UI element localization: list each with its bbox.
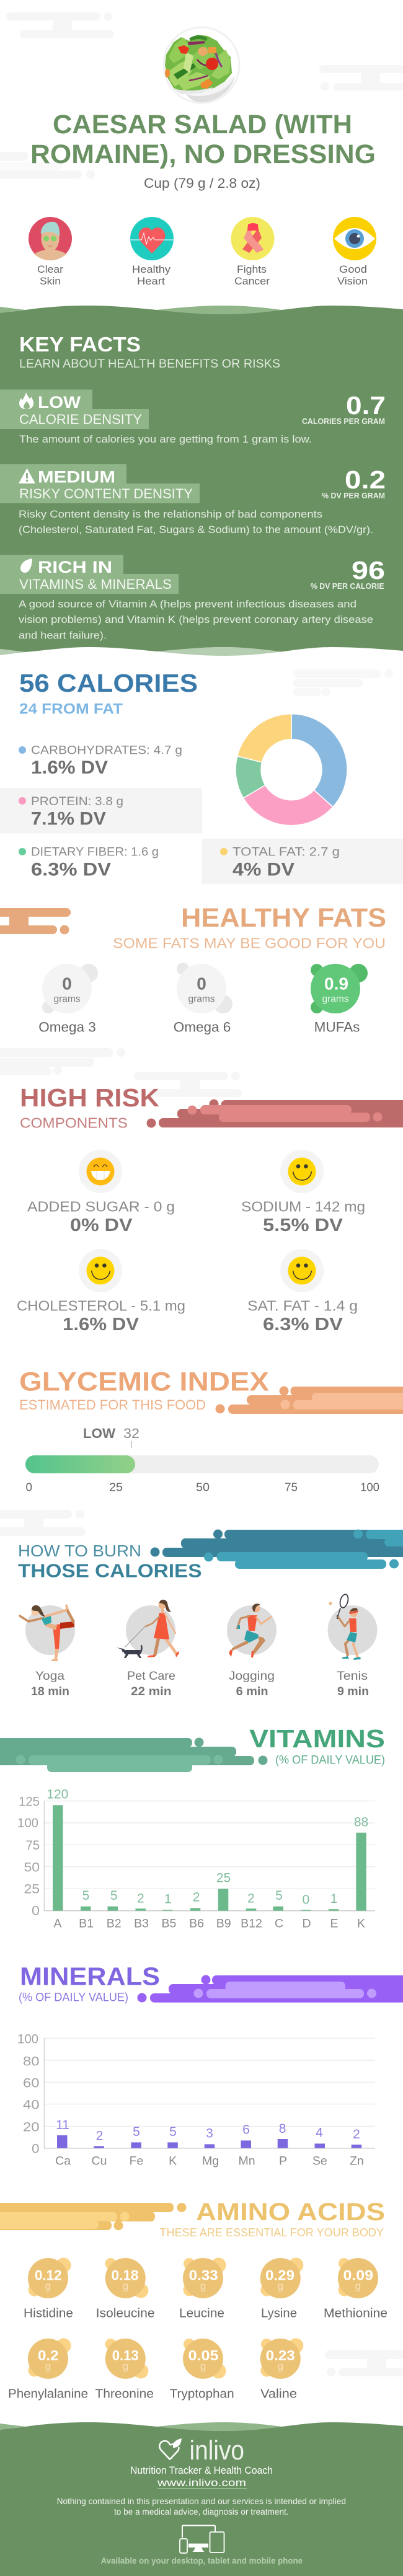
activity: pet care — [117, 1600, 179, 1698]
bar chart: vitamins: 5 — [275, 1889, 283, 1903]
legend: protein: 7.1% DV — [31, 809, 106, 829]
bubble: omega 3: grams — [53, 994, 81, 1005]
bar chart: vitamins: 2 — [193, 1890, 200, 1905]
bar chart: vitamins: D — [303, 1917, 311, 1930]
bar chart: vitamins: 2 — [247, 1891, 255, 1905]
heading: glycemic index — [19, 1367, 269, 1413]
bar chart: vitamins: B12 — [241, 1917, 262, 1930]
activity: yoga: Yoga — [35, 1670, 64, 1683]
fact: rich in vitamins and minerals: 96 — [352, 556, 385, 584]
amino: phenylalanine — [8, 2338, 88, 2401]
fact: rich in vitamins and minerals: vision problems) and Vitamin K (helps prevent coronary artery disease — [19, 614, 373, 625]
heading: calories: 56 CALORIES — [19, 669, 198, 697]
amino: valine: g — [278, 2360, 283, 2372]
legend: carbohydrates: 1.6% DV — [31, 757, 108, 778]
title: ROMAINE), NO DRESSING — [30, 139, 376, 169]
heading: how to burn those calories: THOSE CALORIES — [18, 1559, 202, 1581]
risk: cholesterol: CHOLESTEROL - 5.1 mg — [17, 1297, 185, 1313]
heading: glycemic index: ESTIMATED FOR THIS FOOD — [19, 1397, 206, 1413]
legend: carbohydrates — [19, 744, 182, 778]
amino: threonine — [95, 2339, 154, 2401]
tagline: Nutrition Tracker & Health Coach — [130, 2465, 273, 2476]
glycemic index gauge: LOW — [83, 1426, 115, 1441]
bar chart: minerals: 11 — [56, 2118, 69, 2132]
heading: high risk components — [20, 1083, 159, 1131]
heading: healthy fats: HEALTHY FATS — [181, 904, 386, 933]
benefit: clear skin — [29, 217, 72, 260]
bar chart: vitamins: B5 — [161, 1917, 176, 1930]
amino: lysine: Lysine — [261, 2306, 297, 2320]
heading: amino acids: AMINO ACIDS — [196, 2199, 385, 2226]
bar chart: vitamins: B9 — [216, 1917, 231, 1930]
amino: isoleucine: 0.18 — [112, 2267, 139, 2283]
amino: methionine: 0.09 — [343, 2267, 373, 2283]
label: healthy heart: Heart — [137, 275, 165, 287]
fact: low calorie density: 0.7 — [346, 391, 386, 420]
fact: medium risky content density: RISKY CONTENT DENSITY — [19, 486, 193, 501]
legend: dietary fiber: DIETARY FIBER: 1.6 g — [31, 845, 159, 859]
label: good vision — [337, 263, 368, 287]
bar chart: vitamins: K — [357, 1917, 365, 1930]
risk: saturated fat — [247, 1249, 358, 1334]
bar chart: minerals: 6 — [242, 2123, 250, 2137]
glycemic index gauge: 75 — [285, 1481, 298, 1494]
icon: salad bowl — [164, 27, 239, 103]
amino: leucine — [179, 2257, 226, 2320]
activity: pet care: 22 min — [131, 1685, 171, 1698]
heading: key facts: KEY FACTS — [19, 333, 141, 356]
legend: total fat: 4% DV — [232, 860, 294, 880]
activity: jogging: Jogging — [229, 1670, 275, 1683]
amino: valine — [260, 2338, 303, 2401]
glycemic index gauge: 32 — [123, 1426, 140, 1441]
bar chart: vitamins: A — [53, 1917, 61, 1930]
bar chart: minerals: 2 — [96, 2128, 103, 2143]
label: good vision: Good — [339, 263, 367, 275]
heading: glycemic index: GLYCEMIC INDEX — [19, 1367, 269, 1396]
bar chart: minerals: 3 — [206, 2126, 213, 2140]
logo: inlivo: inlivo — [190, 2435, 244, 2466]
amino: tryptophan — [170, 2339, 234, 2401]
bar chart: vitamins: 88 — [354, 1815, 368, 1830]
amino: histidine: Histidine — [24, 2306, 73, 2320]
risk: sodium: SODIUM - 142 mg — [241, 1198, 365, 1214]
activity: tennis: 9 min — [337, 1685, 369, 1698]
label: healthy heart — [132, 263, 171, 287]
bubble: omega 3: Omega 3 — [38, 1020, 96, 1035]
amino: threonine: 0.13 — [112, 2347, 139, 2363]
fact: rich in vitamins and minerals: A good source of Vitamin A (helps prevent infectious diseases and — [19, 599, 356, 610]
bar chart: vitamins: B6 — [189, 1917, 204, 1930]
panel: key facts — [0, 306, 403, 656]
bar chart: vitamins: 0 — [303, 1893, 309, 1907]
legend: dietary fiber — [19, 845, 159, 880]
risk: added sugar: ADDED SUGAR - 0 g — [27, 1198, 175, 1214]
heading: how to burn those calories — [18, 1542, 202, 1581]
bar chart: minerals: K — [169, 2155, 177, 2168]
bubble: omega 6: 0 — [197, 974, 206, 994]
bar chart: vitamins: 1 — [164, 1892, 172, 1907]
bar chart: vitamins: 120 — [46, 1788, 68, 1802]
amino: methionine — [324, 2258, 388, 2320]
bar chart: vitamins: E — [330, 1917, 339, 1930]
amino: threonine: g — [123, 2360, 128, 2372]
glycemic index gauge: 100 — [360, 1481, 379, 1494]
heading: healthy fats: SOME FATS MAY BE GOOD FOR YOU — [113, 935, 386, 951]
bar chart: minerals: Mn — [238, 2155, 255, 2168]
amino: tryptophan: Tryptophan — [170, 2388, 234, 2401]
bar chart: vitamins: 25 — [216, 1871, 231, 1886]
bar chart: vitamins: 125 — [19, 1794, 40, 1809]
heading: calories — [19, 669, 198, 718]
legend: protein: PROTEIN: 3.8 g — [31, 795, 123, 808]
activity: tennis — [327, 1594, 377, 1698]
amino: methionine: Methionine — [324, 2306, 388, 2320]
bar chart: minerals: 5 — [169, 2125, 177, 2139]
glycemic index gauge: 25 — [109, 1481, 123, 1494]
amino: valine: Valine — [260, 2388, 297, 2401]
panel: footer — [0, 2422, 403, 2576]
activity: tennis: Tenis — [337, 1670, 368, 1683]
donut chart: macronutrients — [236, 714, 347, 826]
bar chart: vitamins: 5 — [82, 1889, 89, 1903]
bubble: omega 3: 0 — [62, 974, 72, 994]
fact: rich in vitamins and minerals: % DV PER CALORIE — [311, 582, 384, 591]
amino: phenylalanine: 0.2 — [38, 2347, 58, 2363]
bubble: mufas: grams — [322, 994, 349, 1005]
amino: leucine: 0.33 — [189, 2267, 218, 2283]
heading: vitamins: (% OF DAILY VALUE) — [275, 1754, 385, 1767]
glycemic index gauge: 0 — [26, 1481, 32, 1494]
fact: low calorie density: The amount of calories you are getting from 1 gram is low. — [19, 434, 312, 445]
bar chart: vitamins: 1 — [330, 1892, 337, 1906]
fact: rich in vitamins and minerals: RICH IN — [38, 558, 112, 576]
amino: leucine: Leucine — [179, 2306, 224, 2320]
amino: histidine: 0.12 — [35, 2267, 62, 2283]
bubble: mufas: MUFAs — [314, 1020, 360, 1035]
amino: methionine: g — [355, 2280, 361, 2292]
amino: leucine: g — [200, 2280, 206, 2292]
benefit: good vision — [333, 217, 376, 260]
bar chart: minerals: Zn — [350, 2155, 364, 2168]
amino: isoleucine: g — [123, 2280, 128, 2292]
bar chart: minerals: Cu — [92, 2155, 107, 2168]
bar chart: minerals: P — [279, 2155, 287, 2168]
amino: histidine — [24, 2257, 73, 2320]
bar chart: minerals: 8 — [279, 2122, 286, 2136]
glycemic index gauge: 50 — [196, 1481, 210, 1494]
amino: tryptophan: g — [200, 2360, 206, 2372]
heading: amino acids: THESE ARE ESSENTIAL FOR YOUR BODY — [160, 2226, 384, 2239]
amino: tryptophan: 0.05 — [188, 2347, 219, 2363]
fact: low calorie density: CALORIES PER GRAM — [302, 417, 385, 426]
bar chart: minerals: 100 — [17, 2032, 38, 2047]
benefit: fights cancer — [231, 217, 274, 260]
fact: rich in vitamins and minerals: VITAMINS & MINERALS — [19, 576, 172, 592]
fact: low calorie density: CALORIE DENSITY — [19, 412, 142, 427]
bar chart: vitamins: 50 — [24, 1860, 40, 1874]
fact: medium risky content density: Risky Content density is the relationship of bad components — [19, 509, 322, 520]
bar chart: minerals: 20 — [23, 2120, 40, 2134]
risk: cholesterol: 1.6% DV — [63, 1315, 140, 1334]
disclaimer — [57, 2497, 346, 2516]
title: CAESAR SALAD (WITH — [53, 110, 352, 139]
amino: lysine — [260, 2257, 303, 2320]
serving size: Cup (79 g / 2.8 oz) — [144, 175, 260, 191]
activity: yoga: 18 min — [31, 1685, 69, 1698]
label: fights cancer — [234, 263, 270, 287]
bar chart: minerals: 5 — [133, 2125, 140, 2139]
bar chart: vitamins: 2 — [137, 1891, 144, 1905]
title — [30, 110, 376, 169]
fact: low calorie density — [0, 389, 386, 445]
bar chart: minerals: 60 — [23, 2076, 40, 2091]
heading: vitamins — [249, 1724, 385, 1767]
heading: high risk components: HIGH RISK — [20, 1083, 159, 1112]
heading: vitamins: VITAMINS — [249, 1724, 385, 1753]
fact: medium risky content density — [0, 464, 386, 536]
heading: minerals: (% OF DAILY VALUE) — [19, 1991, 128, 2004]
amino: lysine: 0.29 — [265, 2267, 294, 2283]
label: good vision: Vision — [337, 275, 368, 287]
bar chart: minerals: Mg — [202, 2155, 219, 2168]
heading: minerals — [19, 1962, 160, 2004]
amino: isoleucine: Isoleucine — [96, 2306, 155, 2320]
activity: jogging — [227, 1603, 277, 1698]
heading: amino acids — [160, 2199, 385, 2239]
amino: phenylalanine: Phenylalanine — [8, 2388, 88, 2401]
label: healthy heart: Healthy — [132, 263, 171, 275]
bar chart: minerals: 4 — [316, 2126, 323, 2140]
bubble: omega 6 — [174, 963, 232, 1035]
icon: warning triangle — [19, 469, 35, 483]
label: clear skin — [37, 263, 63, 287]
bubble: omega 6: Omega 6 — [174, 1020, 231, 1035]
legend: carbohydrates: CARBOHYDRATES: 4.7 g — [31, 744, 182, 757]
bar chart: minerals: 2 — [353, 2127, 360, 2142]
risk: cholesterol — [17, 1249, 185, 1334]
bar chart: vitamins: B2 — [107, 1917, 122, 1930]
benefit: healthy heart — [130, 217, 174, 260]
risk: added sugar — [27, 1150, 175, 1235]
icon: leaf — [20, 558, 32, 573]
bar chart: minerals: Ca — [55, 2155, 71, 2168]
bar chart: minerals: Fe — [130, 2155, 143, 2168]
activity: jogging: 6 min — [236, 1685, 268, 1698]
subheading: key facts: LEARN ABOUT HEALTH BENEFITS OR RISKS — [19, 358, 280, 371]
bar chart: vitamins: 5 — [110, 1889, 118, 1903]
bubble: mufas: 0.9 — [324, 974, 348, 994]
label: fights cancer: Cancer — [234, 275, 270, 287]
icon: devices — [180, 2525, 224, 2553]
heading: high risk components: COMPONENTS — [20, 1114, 128, 1131]
legend: total fat — [202, 839, 403, 884]
risk: saturated fat: SAT. FAT - 1.4 g — [247, 1297, 358, 1313]
bar chart: minerals: 0 — [32, 2142, 40, 2156]
bar chart: vitamins: 100 — [17, 1816, 38, 1830]
bar chart: minerals: 40 — [23, 2098, 40, 2112]
amino: threonine: Threonine — [95, 2388, 154, 2401]
availability note: Available on your desktop, tablet and mobile phone — [100, 2556, 303, 2565]
label: clear skin: Skin — [40, 275, 61, 287]
glycemic index gauge — [25, 1426, 379, 1494]
website link: www.inlivo.com — [157, 2477, 246, 2489]
amino: valine: 0.23 — [266, 2347, 295, 2363]
risk: sodium — [241, 1150, 365, 1235]
activity: pet care: Pet Care — [127, 1670, 175, 1683]
bar chart: minerals: 80 — [23, 2054, 40, 2068]
disclaimer: Nothing contained in this presentation and our services is intended or implied — [57, 2497, 346, 2506]
risk: saturated fat: 6.3% DV — [263, 1315, 343, 1334]
bar chart: vitamins: 0 — [32, 1903, 40, 1918]
legend: total fat: TOTAL FAT: 2.7 g — [232, 845, 340, 859]
legend: dietary fiber: 6.3% DV — [31, 860, 111, 880]
bar chart: vitamins: B1 — [79, 1917, 94, 1930]
fact: low calorie density: LOW — [38, 393, 81, 412]
amino: phenylalanine: g — [45, 2360, 51, 2372]
bar chart: vitamins — [17, 1788, 375, 1930]
fact: medium risky content density: 0.2 — [345, 465, 386, 494]
fact: medium risky content density: MEDIUM — [38, 467, 115, 486]
heading: how to burn those calories: HOW TO BURN — [18, 1542, 141, 1560]
icon: flame — [19, 392, 33, 409]
risk: added sugar: 0% DV — [70, 1215, 133, 1235]
label: clear skin: Clear — [37, 263, 63, 275]
bubble: omega 6: grams — [188, 994, 215, 1005]
bar chart: vitamins: C — [275, 1917, 283, 1930]
logo: inlivo — [159, 2435, 244, 2466]
disclaimer: to be a medical advice, diagnosis or treatment. — [114, 2507, 289, 2516]
legend: protein — [0, 788, 202, 834]
bar chart: vitamins: B3 — [134, 1917, 149, 1930]
fact: rich in vitamins and minerals: and heart failure). — [19, 630, 107, 641]
activity: yoga — [20, 1604, 75, 1698]
fact: medium risky content density: % DV PER GRAM — [322, 492, 385, 500]
heading: healthy fats — [113, 904, 386, 951]
heading: minerals: MINERALS — [20, 1962, 160, 1991]
amino: lysine: g — [278, 2280, 283, 2292]
bubble: mufas — [311, 964, 368, 1035]
bar chart: vitamins: 25 — [24, 1882, 40, 1897]
bar chart: vitamins: 75 — [26, 1838, 40, 1853]
amino: isoleucine — [96, 2258, 155, 2320]
bubble: omega 3 — [38, 964, 98, 1035]
bar chart: minerals — [17, 2032, 375, 2168]
fact: medium risky content density: (Cholesterol, Saturated Fat, Sugars & Sodium) to the amount (%DV/gr). — [19, 524, 373, 536]
amino: histidine: g — [45, 2280, 51, 2292]
bar chart: minerals: Se — [312, 2155, 327, 2168]
fact: rich in vitamins and minerals — [0, 555, 385, 641]
label: fights cancer: Fights — [237, 263, 267, 275]
heading: calories: 24 FROM FAT — [19, 701, 123, 718]
risk: sodium: 5.5% DV — [263, 1215, 343, 1235]
